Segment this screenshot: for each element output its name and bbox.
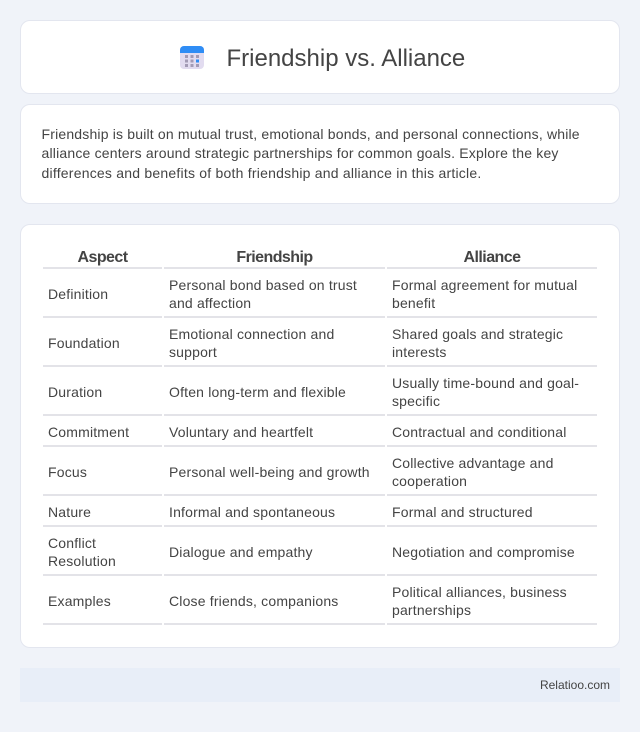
footer text: Relatioo.com xyxy=(540,678,610,692)
row: Definition: Definition xyxy=(48,286,108,302)
table panel xyxy=(20,224,620,648)
row: Focus: Personal well-being and growth xyxy=(169,464,370,480)
icon: calendar xyxy=(180,46,204,69)
intro text: alliance centers around strategic partnerships for common goals. Explore the key xyxy=(42,145,559,161)
row: Definition: Formal agreement for mutual xyxy=(392,277,577,293)
heading: Friendship vs. Alliance xyxy=(226,45,465,72)
intro text: differences and benefits of both friendship and alliance in this article. xyxy=(42,165,481,181)
row: Commitment: Contractual and conditional xyxy=(392,424,567,440)
row: Commitment: Commitment xyxy=(48,424,129,440)
row: Conflict Resolution xyxy=(43,535,597,576)
row: Definition: and affection xyxy=(169,295,251,311)
row: Nature: Nature xyxy=(48,504,91,520)
row: Focus xyxy=(43,455,597,496)
row: Examples: Political alliances, business xyxy=(392,584,567,600)
row: Conflict Resolution: Resolution xyxy=(48,553,116,569)
intro panel xyxy=(20,104,620,204)
row: Commitment: Voluntary and heartfelt xyxy=(169,424,313,440)
intro text xyxy=(42,126,580,181)
row: Focus: cooperation xyxy=(392,473,467,489)
row: Duration xyxy=(43,375,597,416)
row: Foundation: Emotional connection and xyxy=(169,326,334,342)
row: Conflict Resolution: Conflict xyxy=(48,535,96,551)
row: Foundation: Foundation xyxy=(48,335,120,351)
row: Definition xyxy=(43,277,597,318)
row: Focus: Collective advantage and xyxy=(392,455,554,471)
row: Definition: benefit xyxy=(392,295,435,311)
row: Definition: Personal bond based on trust xyxy=(169,277,357,293)
footer bar xyxy=(20,668,620,702)
row: Commitment xyxy=(43,424,597,447)
row: Conflict Resolution: Negotiation and compromise xyxy=(392,544,575,560)
row: Foundation xyxy=(43,326,597,367)
title card xyxy=(20,20,620,94)
column headers: Aspect xyxy=(77,249,128,266)
row: Foundation: Shared goals and strategic xyxy=(392,326,563,342)
row: Conflict Resolution: Dialogue and empathy xyxy=(169,544,313,560)
row: Duration: Duration xyxy=(48,384,102,400)
row: Examples: Close friends, companions xyxy=(169,593,338,609)
row: Duration: Often long-term and flexible xyxy=(169,384,346,400)
row: Foundation: interests xyxy=(392,344,447,360)
column headers: Alliance xyxy=(464,249,520,266)
column headers xyxy=(43,249,597,269)
row: Examples: partnerships xyxy=(392,602,471,618)
row: Focus: Focus xyxy=(48,464,87,480)
row: Duration: Usually time-bound and goal- xyxy=(392,375,579,391)
row: Nature: Formal and structured xyxy=(392,504,533,520)
intro text: Friendship is built on mutual trust, emotional bonds, and personal connections, while xyxy=(42,126,580,142)
row: Examples: Examples xyxy=(48,593,111,609)
row: Nature xyxy=(43,504,597,527)
row: Nature: Informal and spontaneous xyxy=(169,504,335,520)
row: Foundation: support xyxy=(169,344,217,360)
row: Duration: specific xyxy=(392,393,440,409)
column headers: Friendship xyxy=(236,249,313,266)
